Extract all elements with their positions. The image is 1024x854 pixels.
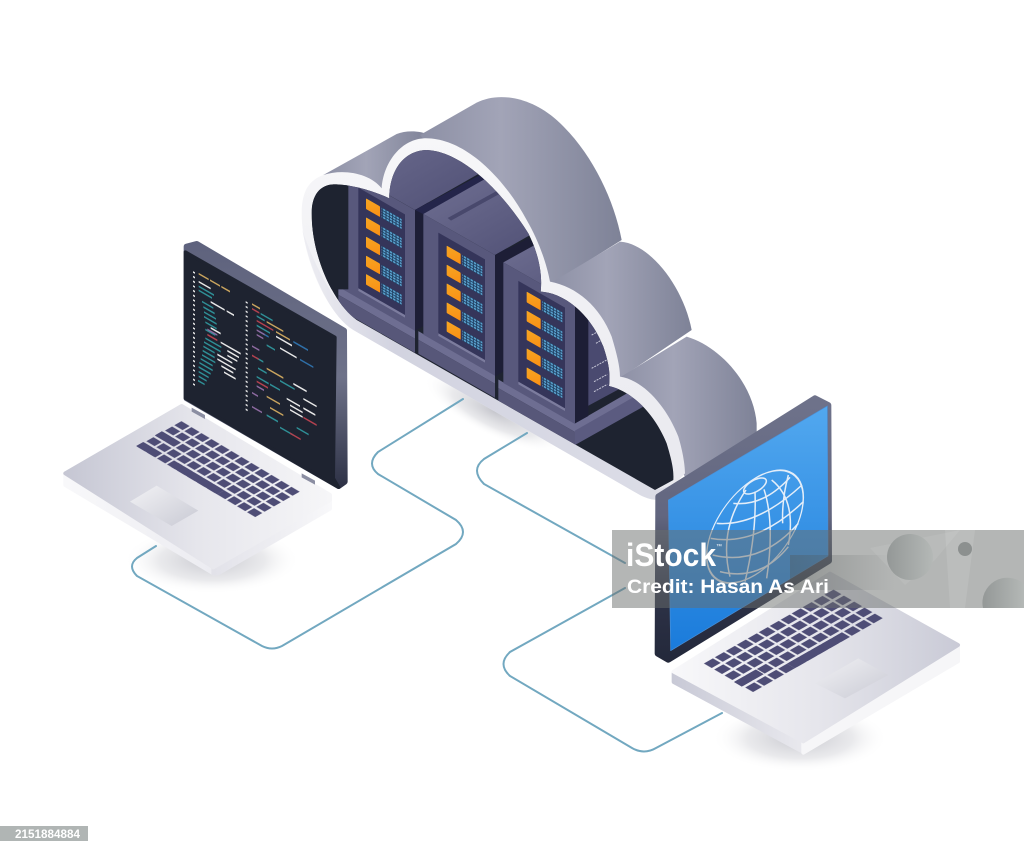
watermark decoration bbox=[790, 530, 1024, 608]
shadow under left laptop bbox=[124, 526, 300, 594]
laptop base bbox=[674, 574, 958, 753]
keyboard bbox=[135, 420, 302, 518]
keyboard bbox=[702, 588, 885, 693]
watermark credit: Credit: Hasan As Ari bbox=[627, 577, 829, 598]
right laptop bbox=[658, 399, 958, 753]
code lines, right column bbox=[247, 301, 317, 453]
watermark trademark: ™ bbox=[716, 543, 722, 550]
cloud lower rim bbox=[302, 230, 673, 500]
trackpad bbox=[130, 486, 198, 526]
laptop screen bbox=[185, 244, 345, 487]
shadow under cloud bbox=[414, 356, 576, 468]
cloud interior bbox=[312, 150, 674, 490]
watermark band bbox=[612, 530, 1024, 608]
network cables bbox=[132, 399, 722, 752]
server rack 2 bbox=[418, 180, 535, 398]
image id tag: 2151884884 bbox=[15, 827, 80, 841]
server rack 3 bbox=[498, 236, 643, 446]
laptop screen bbox=[658, 399, 829, 659]
cloud with server racks bbox=[302, 97, 757, 500]
cloud back extrusion bbox=[323, 97, 757, 477]
laptop base bbox=[65, 406, 330, 573]
cloud front rim bbox=[302, 138, 685, 500]
watermark logo: iStock bbox=[626, 537, 716, 573]
trackpad bbox=[815, 658, 888, 698]
code lines, left column bbox=[194, 271, 241, 413]
shadow under right laptop bbox=[712, 704, 888, 772]
globe icon bbox=[707, 449, 803, 604]
left laptop bbox=[65, 244, 345, 573]
server rack 1 bbox=[312, 150, 486, 353]
